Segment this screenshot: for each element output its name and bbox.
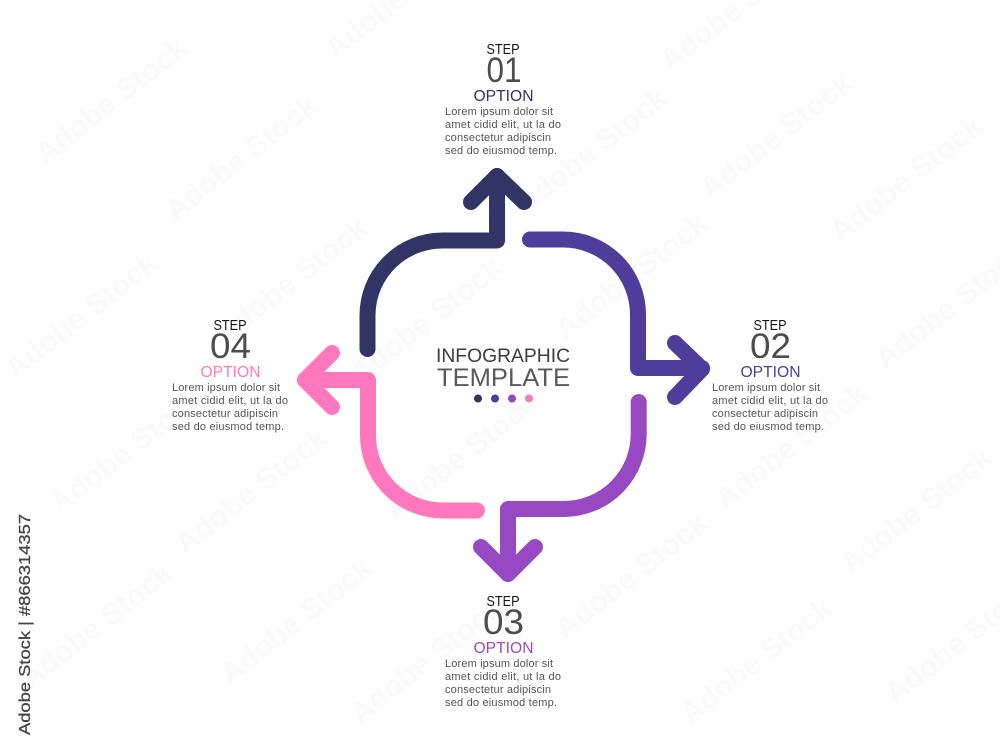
center dots xyxy=(474,394,533,402)
background watermark pattern: Adobe Stock xyxy=(344,251,509,391)
text block: step 04: STEP xyxy=(214,318,246,334)
arrow 2: indigo, pointing right xyxy=(530,240,702,397)
background watermark pattern: Adobe Stock xyxy=(709,376,874,516)
background watermark pattern: Adobe Stock xyxy=(14,556,179,696)
text block: step 02: amet cidid elit, ut la do xyxy=(712,395,828,407)
arrow 4: pink, pointing left xyxy=(305,353,477,510)
text block: step 03: STEP xyxy=(486,594,520,610)
center title xyxy=(436,346,570,392)
text block: step 01: consectetur adipiscin xyxy=(445,132,551,144)
text block: step 01: OPTION xyxy=(474,88,534,105)
background watermark pattern: Adobe Stock xyxy=(214,551,379,691)
text block: step 01: sed do eiusmod temp. xyxy=(445,145,557,157)
text block: step 03: Lorem ipsum dolor sit xyxy=(445,658,553,670)
background watermark pattern: Adobe Stock xyxy=(549,206,714,346)
text block: step 03: OPTION xyxy=(474,640,534,657)
text block: step 03: amet cidid elit, ut la do xyxy=(445,671,561,683)
text block: step 02 xyxy=(712,318,828,433)
background watermark pattern: Adobe Stock xyxy=(549,506,714,646)
background watermark pattern: Adobe Stock xyxy=(29,31,194,171)
text block: step 03 xyxy=(445,594,561,709)
text block: step 01: 01 xyxy=(486,51,522,90)
text block: step 01 xyxy=(445,42,561,157)
background watermark pattern: Adobe Stock xyxy=(0,246,164,386)
text block: step 01: amet cidid elit, ut la do xyxy=(445,119,561,131)
arrow 1: navy, pointing up xyxy=(368,176,524,349)
background watermark pattern: Adobe Stock xyxy=(159,88,324,228)
background watermark pattern: Adobe Stock xyxy=(509,81,674,221)
text block: step 04 xyxy=(172,318,288,433)
text block: step 03: 03 xyxy=(483,603,524,642)
text block: step 01: STEP xyxy=(486,42,520,58)
center title: TEMPLATE xyxy=(437,364,570,392)
background watermark pattern: Adobe Stock xyxy=(209,211,374,351)
text block: step 04: Lorem ipsum dolor sit xyxy=(172,382,280,394)
text block: step 02: Lorem ipsum dolor sit xyxy=(712,382,820,394)
text block: step 02: STEP xyxy=(754,318,786,334)
text block: step 04: sed do eiusmod temp. xyxy=(172,421,284,433)
stock id side label: Adobe Stock | #866314357 xyxy=(17,514,34,735)
text block: step 04: OPTION xyxy=(200,364,260,381)
background watermark pattern: Adobe Stock xyxy=(674,591,839,731)
arrow 3: violet, pointing down xyxy=(481,402,639,574)
background watermark pattern: Adobe Stock xyxy=(169,421,334,561)
text block: step 02: 02 xyxy=(750,327,791,366)
text block: step 02: sed do eiusmod temp. xyxy=(712,421,824,433)
text block: step 03: consectetur adipiscin xyxy=(445,684,551,696)
background watermark pattern: Adobe Stock xyxy=(834,441,999,581)
background watermark pattern: Adobe Stock xyxy=(694,66,859,206)
center title: INFOGRAPHIC xyxy=(436,346,570,367)
background watermark pattern: Adobe Stock xyxy=(344,591,509,731)
background watermark pattern: Adobe Stock xyxy=(824,109,989,249)
text block: step 02: OPTION xyxy=(740,364,800,381)
text block: step 04: amet cidid elit, ut la do xyxy=(172,395,288,407)
text block: step 04: 04 xyxy=(210,327,251,366)
background watermark pattern: Adobe Stock xyxy=(44,381,209,521)
text block: step 01: Lorem ipsum dolor sit xyxy=(445,106,553,118)
text block: step 02: consectetur adipiscin xyxy=(712,408,818,420)
text block: step 04: consectetur adipiscin xyxy=(172,408,278,420)
background watermark pattern: Adobe Stock xyxy=(379,386,544,526)
text block: step 03: sed do eiusmod temp. xyxy=(445,697,557,709)
